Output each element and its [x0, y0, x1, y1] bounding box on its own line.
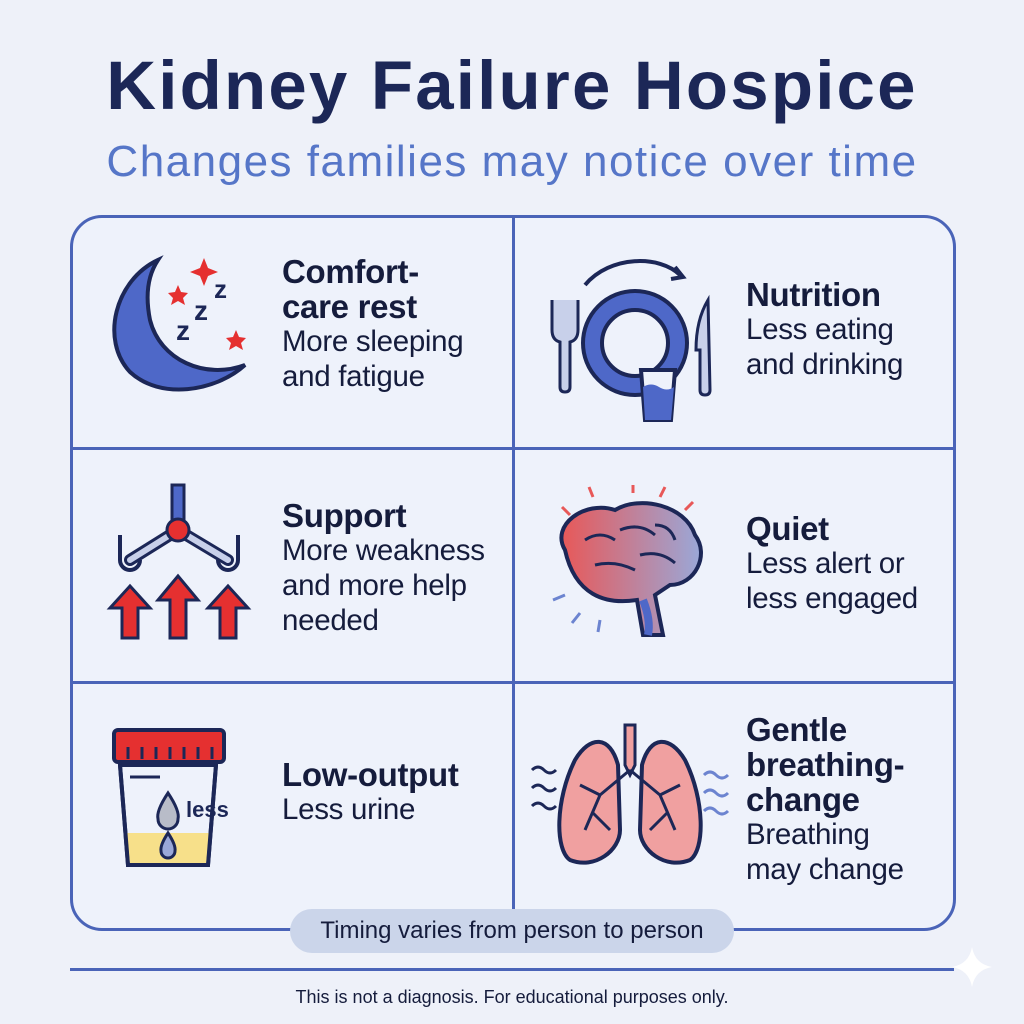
- text: less engaged: [746, 582, 918, 615]
- text: Low-output: [282, 756, 459, 793]
- cell: low-output: [112, 728, 459, 867]
- icon: urine cup: less: [186, 797, 229, 822]
- icon: moon: z: [214, 274, 227, 304]
- title: Kidney Failure Hospice: [106, 47, 918, 124]
- text: [282, 497, 485, 637]
- text: Less eating: [746, 313, 894, 346]
- footer disclaimer: This is not a diagnosis. For educational purposes only.: [296, 987, 728, 1007]
- text: Quiet: [746, 510, 829, 547]
- icon: lungs: [531, 724, 729, 865]
- cell: comfort-care rest: [112, 253, 463, 393]
- text: [282, 253, 463, 393]
- text: Gentle: [746, 711, 847, 748]
- text: Less alert or: [746, 547, 904, 580]
- icon: plate fork knife glass: [550, 259, 712, 422]
- text: Less urine: [282, 793, 415, 826]
- cell: support: [106, 484, 485, 640]
- icon: urine cup: [112, 728, 229, 867]
- panel grid: [70, 215, 956, 931]
- text: breathing-: [746, 746, 904, 783]
- icon: lift arrows: [106, 484, 252, 640]
- text: Comfort-: [282, 253, 419, 290]
- text: and more help: [282, 569, 467, 602]
- subtitle: Changes families may notice over time: [106, 137, 918, 186]
- text: Breathing: [746, 818, 870, 851]
- pill: timing note: Timing varies from person to person: [320, 917, 704, 944]
- text: and drinking: [746, 348, 903, 381]
- text: needed: [282, 604, 379, 637]
- icon: moon: z: [176, 315, 190, 346]
- text: More weakness: [282, 534, 485, 567]
- text: Nutrition: [746, 276, 881, 313]
- text: may change: [746, 853, 904, 886]
- divider line: [70, 968, 954, 971]
- icon: moon: z: [194, 295, 208, 326]
- text: More sleeping: [282, 325, 463, 358]
- cell: nutrition: [550, 259, 903, 422]
- text: and fatigue: [282, 360, 425, 393]
- text: [746, 711, 904, 886]
- icon: brain: [552, 485, 703, 637]
- text: [746, 510, 918, 615]
- icon: moon: [112, 255, 246, 392]
- text: care rest: [282, 288, 417, 325]
- icon: sparkle: [953, 948, 991, 986]
- cell: gentle breathing-change: [531, 711, 904, 886]
- text: [746, 276, 903, 381]
- text: change: [746, 781, 860, 818]
- text: Support: [282, 497, 406, 534]
- text: [282, 756, 459, 826]
- cell: quiet: [552, 485, 918, 637]
- pill: timing note: [290, 909, 734, 953]
